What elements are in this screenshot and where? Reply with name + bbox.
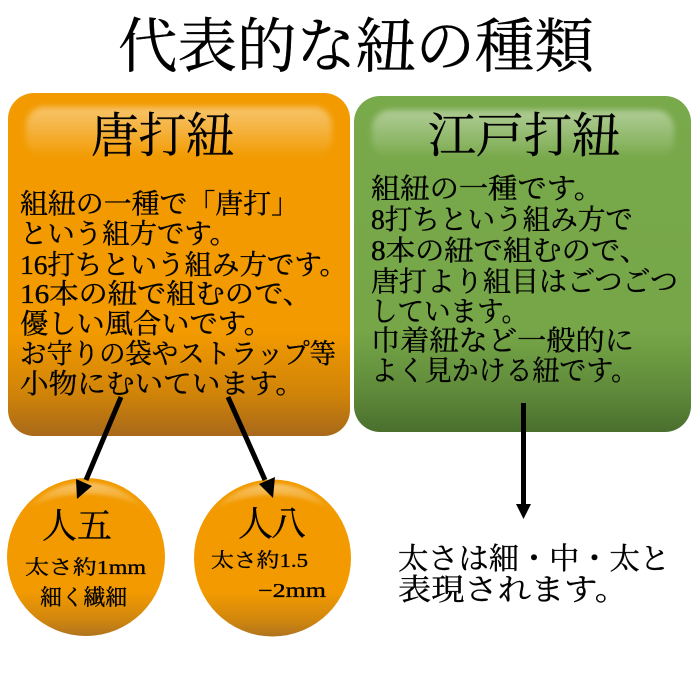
heading: 人五: 人五 [42,507,112,546]
circle: 人五 [7,478,165,636]
circle: 人八 [194,480,351,636]
text block: 唐打紐 description [20,188,347,399]
text block: 唐打紐 description: 組紐の一種で「唐打」 [20,188,299,219]
text block: 唐打紐 description: 優しい風合いです。 [20,308,272,339]
text block: 江戸打紐 description: 8打ちという組み方で [371,204,633,236]
text block: 江戸打紐 description: 組紐の一種です。 [371,173,603,205]
text block: thickness note: 表現されます。 [398,574,628,607]
text: thickness: 太さ約1.5 [211,549,308,572]
text block: 江戸打紐 description: 8本の紐で組むので、 [371,235,649,267]
text block: thickness note: 太さは細・中・太と [398,543,670,576]
title: 代表的な紐の種類 [118,14,594,80]
text block: 唐打紐 description: 小物にむいています。 [20,368,304,399]
text block: 唐打紐 description: 16打ちという組み方です。 [20,249,347,280]
panel: 唐打紐 [8,93,350,436]
text block: 唐打紐 description: お守りの袋やストラップ等 [20,338,336,369]
text block: 江戸打紐 description: 巾着紐など一般的に [371,325,634,357]
text block: 江戸打紐 description: よく見かける紐です。 [371,355,638,387]
text block: 唐打紐 description: という組方です。 [20,218,237,249]
text block: 江戸打紐 description [371,173,678,387]
heading: 唐打紐: 唐打紐 [91,110,234,163]
text block: 江戸打紐 description: しています。 [371,297,528,328]
arrow: 唐打紐 to 人五 [76,397,121,499]
panel: 江戸打紐 [354,96,691,432]
text block: thickness note [398,543,670,607]
arrow: 江戸打紐 to thickness note [516,403,531,519]
text block: 唐打紐 description: 16本の紐で組むので、 [20,278,312,309]
text: thickness: 太さ約1mm [25,556,147,579]
heading: 江戸打紐: 江戸打紐 [428,110,620,163]
text: thickness range: −2mm [258,580,327,602]
text block: 江戸打紐 description: 唐打より組目はごつごつ [371,266,678,298]
heading: 人八: 人八 [238,505,306,544]
arrow: 唐打紐 to 人八 [228,397,275,498]
text: description: 細く繊細 [40,585,127,610]
